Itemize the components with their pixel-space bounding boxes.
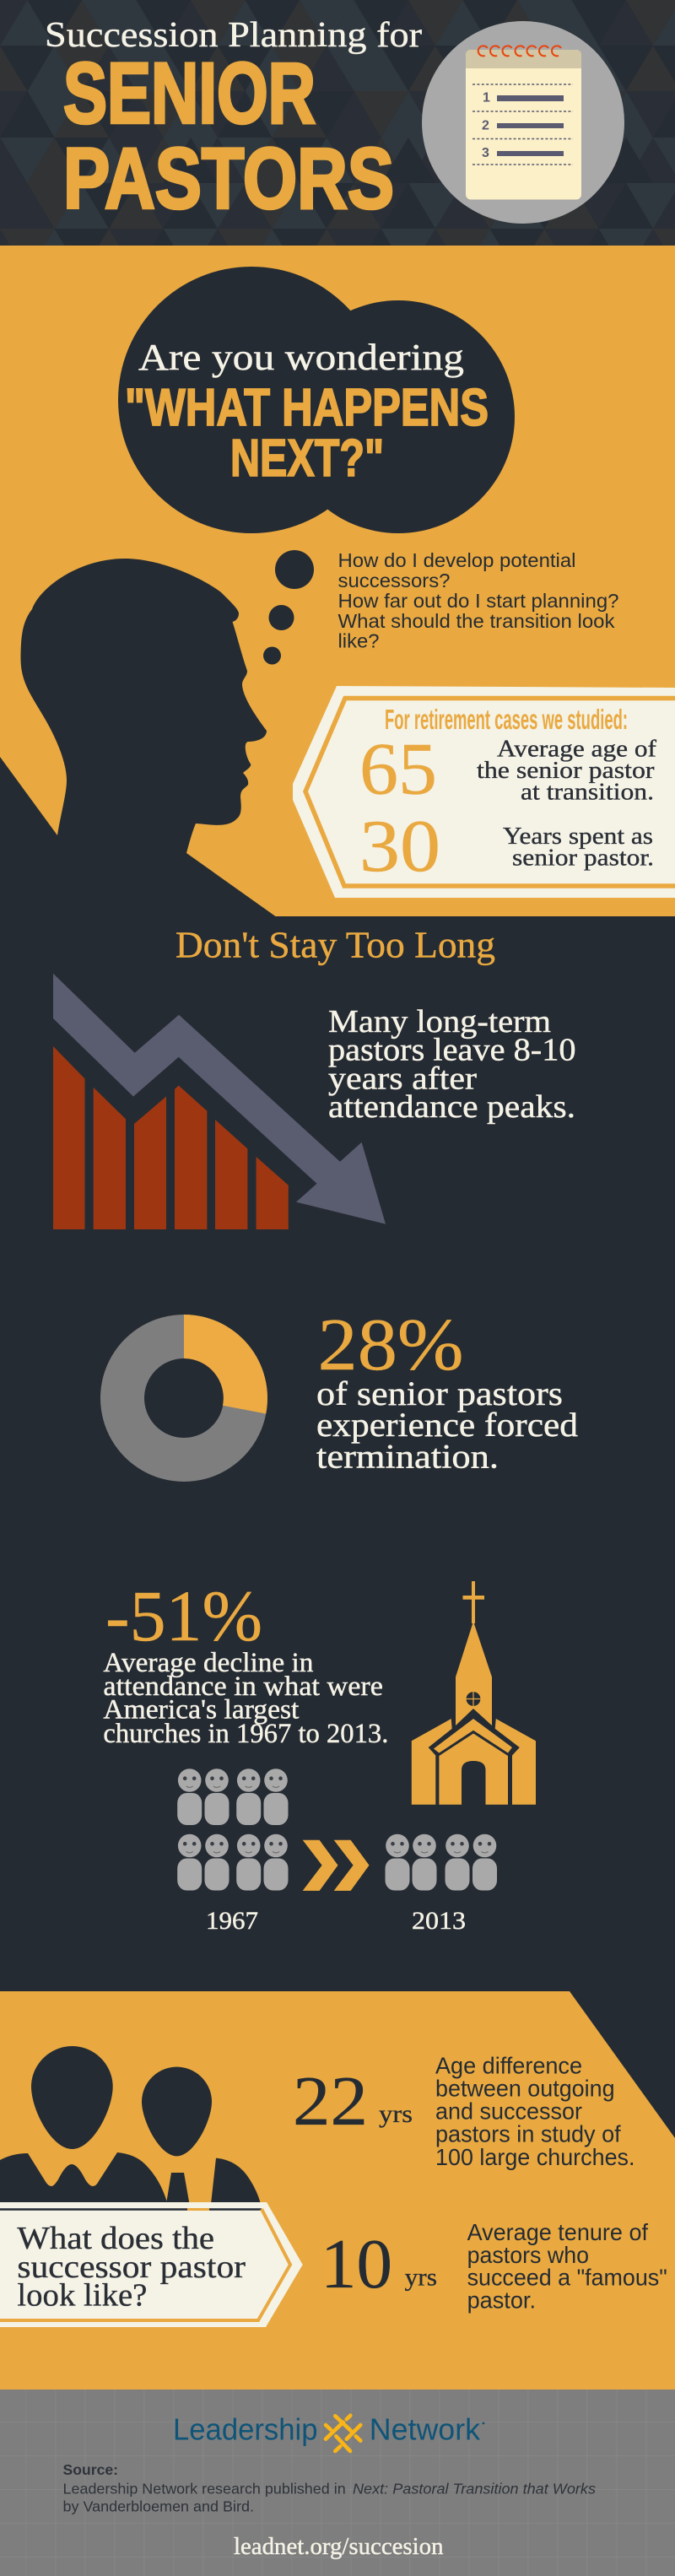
text: long-term pastors: years after <box>328 1061 477 1097</box>
callout text <box>17 2221 246 2314</box>
callout text: look like? <box>17 2278 147 2314</box>
stat: -51%: -51% <box>105 1575 262 1656</box>
footer link: leadnet.org/succesion <box>234 2533 444 2560</box>
stat label: years spent <box>503 824 654 872</box>
icon: 2013 congregation <box>385 1834 497 1890</box>
stat: 10 yrs <box>321 2225 437 2303</box>
orange background: successor section <box>0 1991 675 2390</box>
source note: by Vanderbloemen and Bird. <box>62 2498 254 2514</box>
source note: Leadership Network research published in <box>62 2480 346 2497</box>
bubble text: Next: NEXT?" <box>230 429 384 488</box>
stat: 22 yrs: yrs <box>379 2100 413 2128</box>
label: 2013: 2013 <box>412 1907 466 1935</box>
title: kicker: Succession Planning for <box>45 16 422 55</box>
callout text: What does the <box>17 2221 214 2256</box>
panel: retirement stats <box>293 686 675 898</box>
bubble text: What happens: "WHAT HAPPENS <box>125 379 489 437</box>
text: average decline: America's largest <box>103 1694 299 1725</box>
icon: notepad checklist in grey circle: 1 <box>483 91 490 105</box>
stat label: years spent: senior pastor. <box>512 845 654 872</box>
text: average decline: Average decline in <box>103 1648 313 1678</box>
icon: notepad checklist in grey circle: 2 <box>482 118 489 133</box>
logo: Leadership Network <box>173 2412 484 2451</box>
bubble text: Are you wondering: Are you wondering <box>138 337 464 378</box>
stat: 22 yrs <box>293 2062 413 2141</box>
stat: 10 yrs: 10 <box>321 2225 392 2303</box>
text: average tenure <box>467 2219 667 2314</box>
icon: 1967 congregation <box>177 1769 289 1890</box>
head silhouette <box>0 559 275 916</box>
thought bubble <box>118 267 515 533</box>
text: age difference: Age difference <box>435 2053 582 2079</box>
icon: two pastors silhouette <box>0 2046 261 2204</box>
stat label: average age <box>477 737 657 805</box>
stat: 10 yrs: yrs <box>405 2264 437 2292</box>
stat label: average age: Average age of <box>497 737 657 763</box>
stat label: average age: at transition. <box>521 780 654 805</box>
text: forced termination: experience forced <box>316 1406 578 1444</box>
text: long-term pastors: pastors leave 8-10 <box>328 1033 576 1068</box>
donut chart: 28% <box>100 1315 267 1482</box>
title block <box>45 16 422 226</box>
text: age difference: 100 large churches. <box>435 2144 634 2170</box>
text: long-term pastors <box>328 1004 576 1125</box>
title: PASTORS: PASTORS <box>63 130 394 226</box>
text: average tenure: Average tenure of <box>467 2219 648 2245</box>
questions text: How far out do I start planning? <box>338 590 619 612</box>
source note <box>62 2461 596 2514</box>
text: average decline <box>103 1648 388 1749</box>
text: age difference: and successor <box>435 2098 582 2124</box>
icon: chevron arrows <box>303 1840 370 1891</box>
text: average tenure: succeed a "famous" <box>467 2265 667 2291</box>
questions text: How do I develop potential <box>338 549 575 571</box>
logo: Leadership Network: Leadership <box>173 2412 317 2447</box>
text: average decline: attendance in what were <box>103 1671 383 1702</box>
source note: Next: Pastoral Transition that Works <box>353 2480 596 2497</box>
icon: thought dots <box>263 550 314 665</box>
icon: church <box>412 1581 536 1805</box>
stat label: years spent: Years spent as <box>503 824 653 850</box>
icon: notepad checklist in grey circle <box>422 21 624 224</box>
source note: Source: <box>62 2461 118 2478</box>
text: forced termination <box>316 1374 578 1476</box>
footer background <box>0 2390 675 2576</box>
heading: Don't Stay Too Long: Don't Stay Too Long <box>176 925 495 966</box>
text: average tenure: pastors who <box>467 2242 589 2268</box>
text: long-term pastors: Many long-term <box>328 1004 551 1040</box>
label: 1967: 1967 <box>206 1907 258 1935</box>
header background: triangle pattern <box>0 0 675 274</box>
stat: 28%: 28% <box>317 1304 464 1386</box>
questions text <box>338 549 619 652</box>
title: SENIOR: SENIOR <box>63 46 316 142</box>
icon: woven logo mark <box>326 2416 360 2451</box>
callout: what does the successor pastor look like <box>0 2202 303 2327</box>
text: age difference: between outgoing <box>435 2076 615 2101</box>
text: forced termination: termination. <box>316 1438 499 1476</box>
orange background: intro section <box>0 246 675 916</box>
text: forced termination: of senior pastors <box>316 1374 563 1412</box>
logo: Leadership Network: Network <box>370 2412 481 2447</box>
text: average tenure: pastor. <box>467 2287 536 2314</box>
questions text: successors? <box>338 570 451 591</box>
text: long-term pastors: attendance peaks. <box>328 1089 575 1125</box>
stat: 65: 65 <box>359 729 437 810</box>
stat label: average age: the senior pastor <box>477 758 655 784</box>
chart: declining bars with arrow <box>53 974 386 1229</box>
text: age difference <box>435 2053 634 2170</box>
questions text: like? <box>338 630 380 652</box>
text: average decline: churches in 1967 to 2013. <box>103 1719 388 1749</box>
callout text: successor pastor <box>17 2249 246 2285</box>
icon: notepad checklist in grey circle: 3 <box>482 146 489 160</box>
questions text: What should the transition look <box>338 610 615 632</box>
dark background: main section <box>0 916 675 1991</box>
text: age difference: pastors in study of <box>435 2120 621 2147</box>
stat: 22 yrs: 22 <box>293 2062 368 2141</box>
stat: 30: 30 <box>359 806 440 888</box>
